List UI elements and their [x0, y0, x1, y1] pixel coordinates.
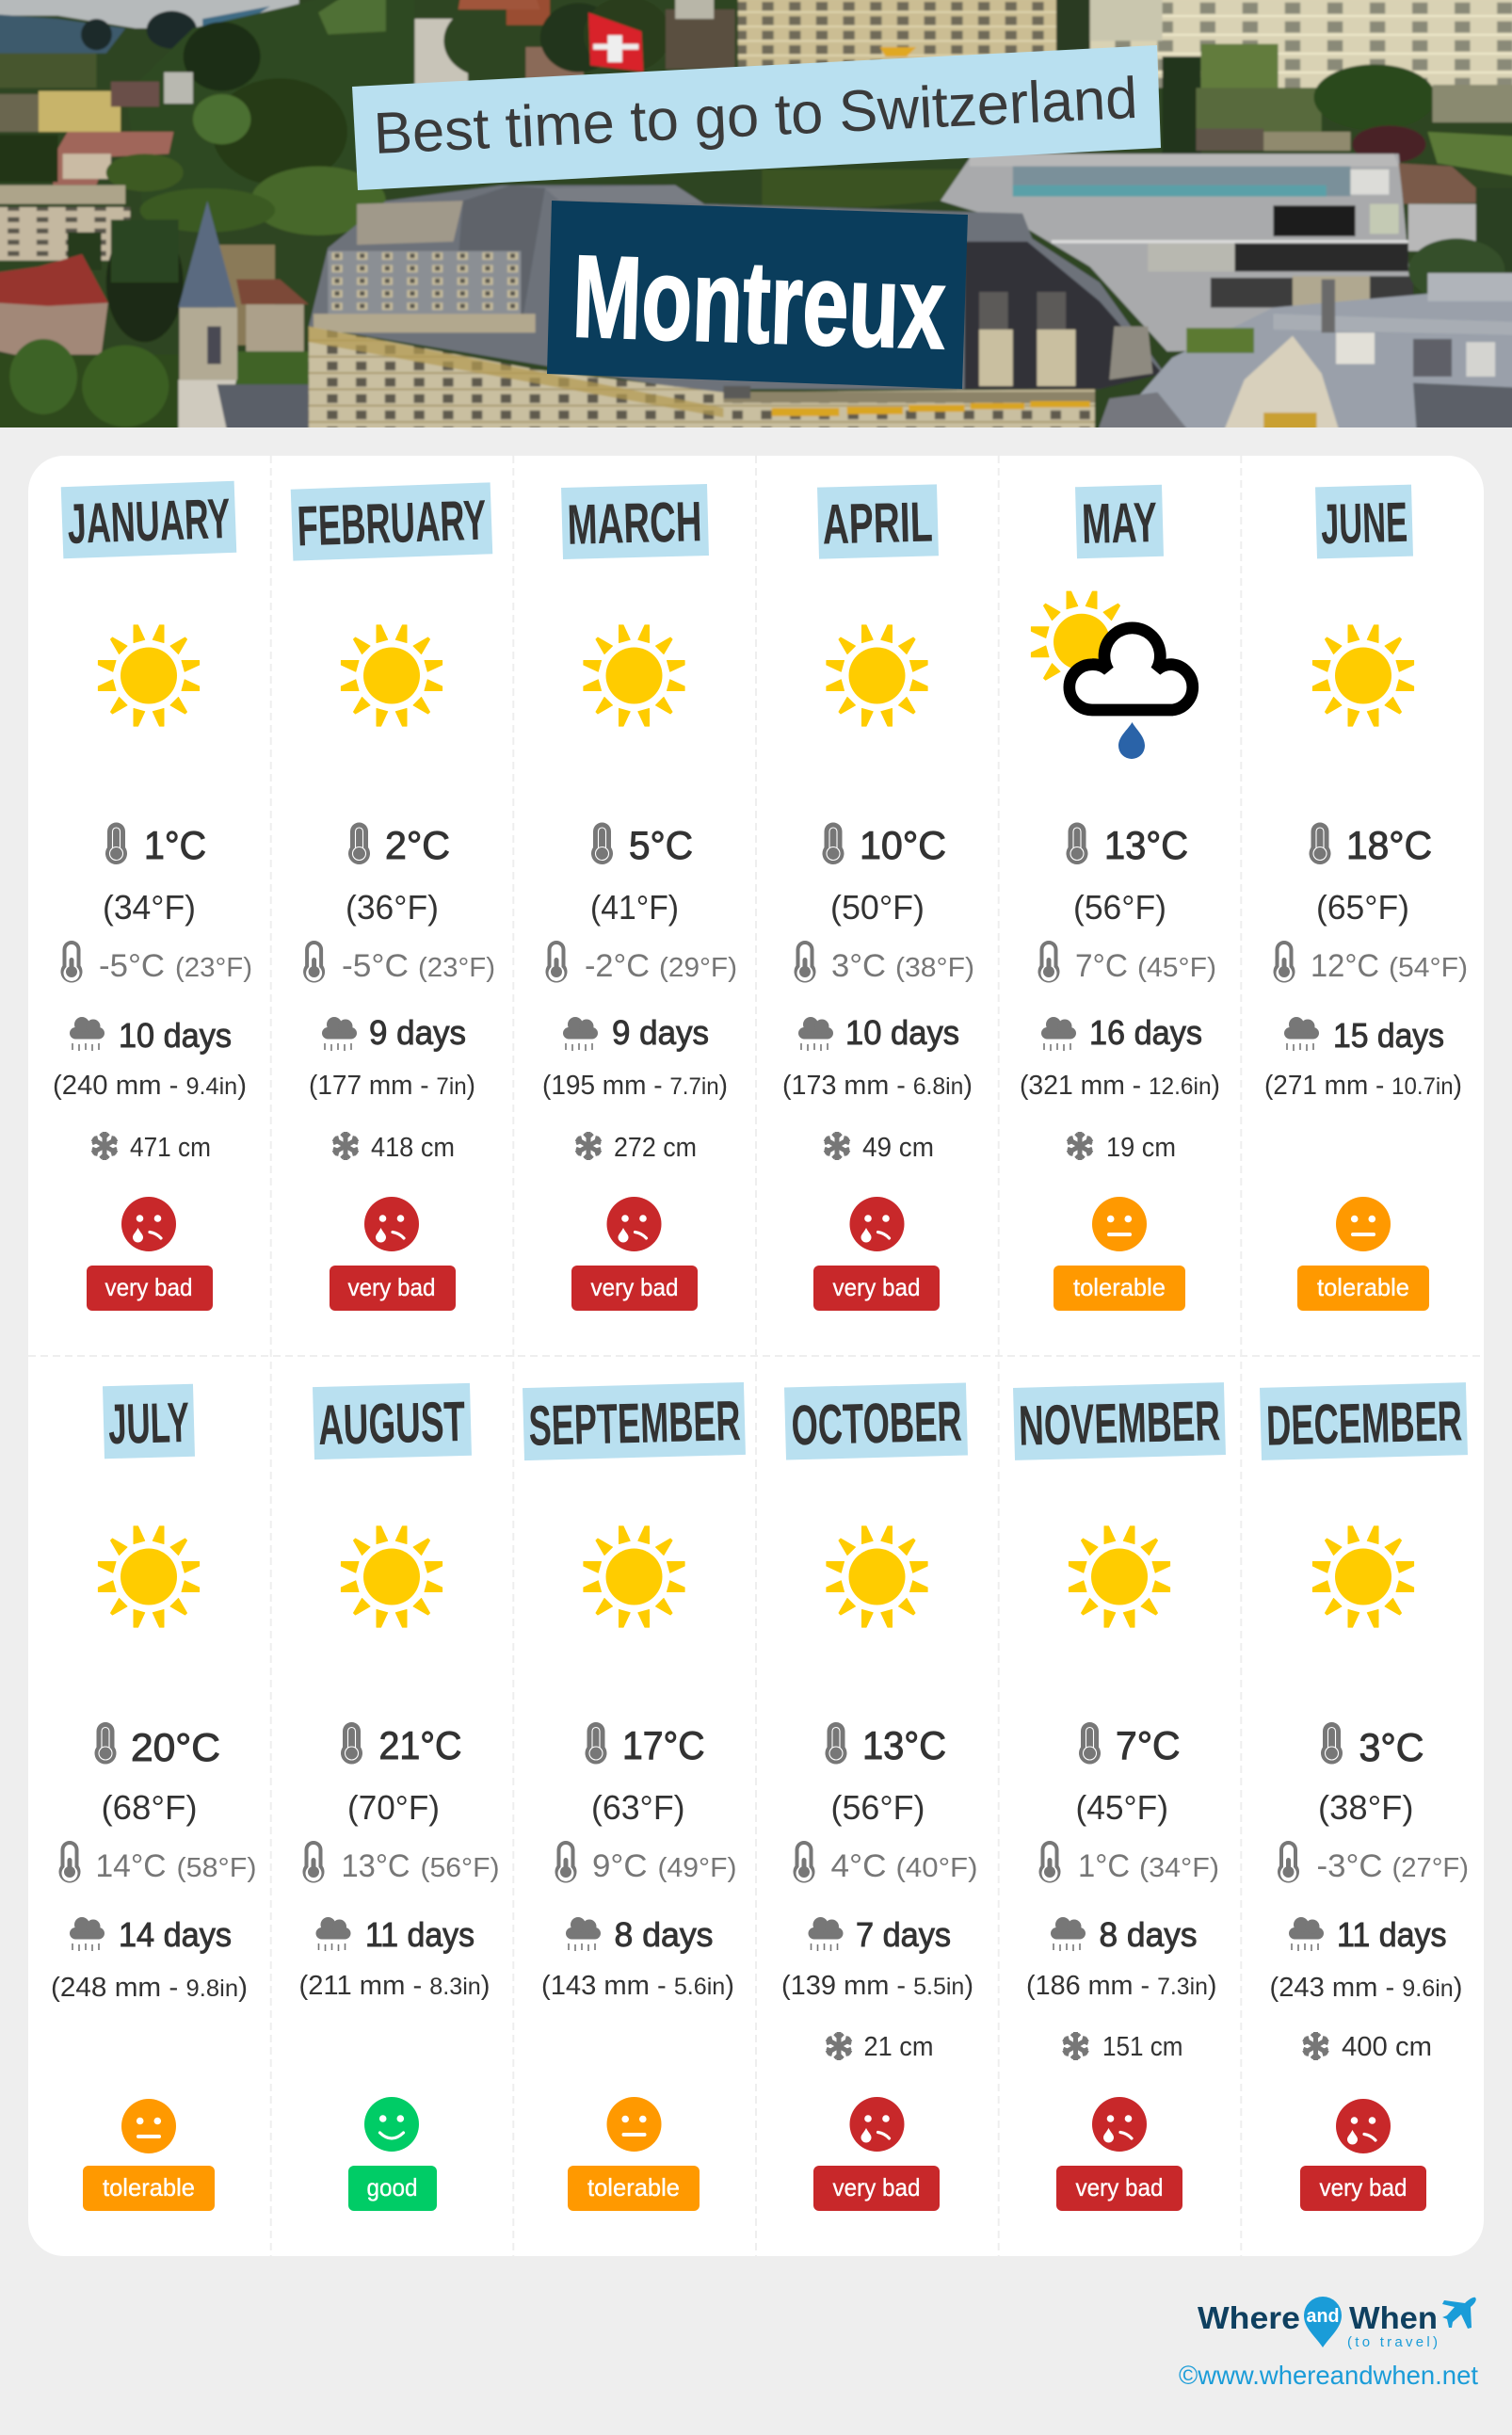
logo: Where and When (to travel): Where — [1198, 2300, 1300, 2335]
rating: very bad — [330, 1197, 456, 1311]
rain days: 8 days — [614, 1915, 714, 1954]
high temperature: (38°F) — [1318, 1788, 1414, 1827]
snowfall: 418 cm — [371, 1133, 455, 1163]
high temperature: 2°C — [385, 823, 450, 867]
snowfall — [827, 2032, 934, 2062]
low temperature: (38°F) — [895, 953, 974, 983]
panel: October — [781, 1383, 977, 2211]
title box: Montreux — [547, 201, 968, 389]
panel: August — [299, 1383, 499, 2211]
low temperature — [1039, 1841, 1219, 1884]
low temperature — [303, 1841, 499, 1884]
low temperature: -3°C — [1316, 1848, 1382, 1884]
month label: March: MARCH — [567, 490, 702, 556]
copyright url: ©www.whereandwhen.net — [1179, 2361, 1478, 2390]
high temperature: 20°C — [131, 1725, 220, 1769]
high temperature: 3°C — [1359, 1725, 1424, 1769]
snowfall: 471 cm — [130, 1133, 211, 1163]
panel: March — [542, 484, 737, 1311]
rating: tolerable — [83, 2099, 215, 2211]
rating: good — [348, 2097, 437, 2211]
panel: June — [1264, 485, 1468, 1311]
high temperature: (36°F) — [346, 888, 439, 927]
low temperature — [58, 1841, 256, 1884]
high temperature — [1075, 1722, 1181, 1827]
high temperature: 17°C — [622, 1723, 704, 1767]
rating: very bad: very bad — [591, 1273, 678, 1301]
snowfall — [1303, 2032, 1432, 2062]
rating: very bad: very bad — [1075, 2173, 1164, 2201]
snowfall — [1068, 1132, 1176, 1163]
icon: sun — [1312, 625, 1414, 726]
low temperature: 7°C — [1075, 948, 1128, 984]
rating: very bad: very bad — [105, 1273, 192, 1301]
high temperature — [341, 1722, 461, 1827]
rain days — [542, 1013, 728, 1101]
snowfall: 49 cm — [862, 1133, 934, 1163]
snowfall: 151 cm — [1102, 2032, 1182, 2062]
rating: very bad: very bad — [348, 1273, 435, 1301]
rating: very bad: very bad — [832, 1273, 921, 1301]
high temperature — [94, 1722, 220, 1827]
low temperature: (23°F) — [175, 953, 252, 983]
snowfall — [1064, 2032, 1182, 2062]
month label: September: SEPTEMBER — [528, 1389, 741, 1458]
rain days: (173 mm - 6.8in) — [782, 1071, 973, 1101]
rain days — [51, 1915, 248, 2003]
low temperature — [555, 1841, 736, 1884]
rating: very bad — [1300, 2099, 1426, 2211]
icon: sun behind rain cloud — [1031, 591, 1193, 759]
low temperature: 3°C — [831, 948, 886, 984]
high temperature: 5°C — [629, 823, 693, 867]
rating: very bad — [813, 2097, 940, 2211]
panel: September — [523, 1382, 746, 2211]
rating: tolerable — [568, 2097, 700, 2211]
low temperature: -5°C — [99, 948, 165, 984]
title box: Montreux: Montreux — [571, 232, 947, 374]
high temperature: (70°F) — [347, 1788, 440, 1827]
month label: April: APRIL — [822, 490, 933, 556]
low temperature: (45°F) — [1137, 953, 1216, 983]
high temperature: (63°F) — [591, 1788, 685, 1827]
low temperature: (49°F) — [657, 1853, 736, 1883]
rain days: 9 days — [612, 1013, 709, 1052]
high temperature: (45°F) — [1075, 1788, 1168, 1827]
rain days: 7 days — [856, 1915, 951, 1954]
rain days — [53, 1016, 247, 1101]
low temperature: (40°F) — [896, 1853, 977, 1883]
snowfall: 272 cm — [614, 1133, 697, 1163]
rain days — [309, 1013, 475, 1101]
logo: Where and When (to travel) — [1198, 2297, 1476, 2350]
icon: sun — [584, 625, 684, 726]
panel: December — [1260, 1382, 1469, 2211]
rating: very bad: very bad — [832, 2173, 921, 2201]
rain days: (143 mm - 5.6in) — [541, 1971, 734, 2001]
month label: June — [1315, 485, 1413, 558]
high temperature: (68°F) — [102, 1788, 198, 1827]
high temperature — [103, 823, 206, 927]
title ribbon: Best time to go to Switzerland: Best time to go to Switzerland — [372, 66, 1139, 167]
rain days: 10 days — [119, 1016, 232, 1055]
low temperature: 1°C — [1078, 1848, 1130, 1884]
snowfall — [92, 1132, 211, 1163]
rating: very bad — [1056, 2097, 1182, 2211]
rain days: (240 mm - 9.4in) — [53, 1071, 247, 1101]
title ribbon: Best time to go to Switzerland — [352, 45, 1161, 190]
icon: sun — [98, 625, 200, 726]
month label: November: NOVEMBER — [1018, 1389, 1221, 1458]
rain days: (195 mm - 7.7in) — [542, 1071, 728, 1101]
high temperature — [823, 823, 946, 927]
high temperature: (34°F) — [103, 888, 196, 927]
month label: May — [1075, 485, 1164, 558]
rain days: 11 days — [365, 1915, 475, 1954]
rating: tolerable — [1297, 1197, 1429, 1311]
rain days: (321 mm - 12.6in) — [1020, 1071, 1220, 1101]
low temperature: -5°C — [342, 948, 409, 984]
icon: sun — [1312, 1526, 1414, 1627]
month label: February — [291, 482, 492, 561]
high temperature: 7°C — [1116, 1723, 1181, 1767]
high temperature: (50°F) — [830, 888, 925, 927]
high temperature: (56°F) — [830, 1788, 925, 1827]
low temperature: (54°F) — [1389, 953, 1468, 983]
month label: May: MAY — [1081, 491, 1158, 556]
month label: October — [784, 1383, 968, 1460]
low temperature: 13°C — [341, 1848, 410, 1884]
icon: sun — [827, 1526, 927, 1627]
month label: July — [103, 1384, 195, 1459]
rating: tolerable: tolerable — [103, 2173, 195, 2201]
icon: sun — [584, 1526, 684, 1627]
high temperature — [825, 1722, 946, 1827]
panel: February — [291, 482, 495, 1311]
header photo: Montreux town view — [0, 0, 1512, 452]
high temperature: 1°C — [144, 823, 206, 867]
low temperature — [1273, 941, 1468, 984]
low temperature — [1037, 941, 1216, 984]
icon: sun — [827, 625, 927, 726]
month label: March — [561, 484, 709, 559]
rain days: 15 days — [1333, 1016, 1444, 1055]
month label: January: JANUARY — [66, 487, 232, 556]
low temperature: 14°C — [96, 1848, 166, 1884]
rating: tolerable: tolerable — [587, 2173, 680, 2201]
high temperature — [590, 823, 693, 927]
rain days: (243 mm - 9.6in) — [1269, 1973, 1463, 2003]
icon: sun — [1069, 1526, 1170, 1627]
rating: very bad — [571, 1197, 698, 1311]
low temperature — [795, 941, 974, 984]
rain days: 9 days — [369, 1013, 466, 1052]
low temperature: (34°F) — [1139, 1853, 1219, 1883]
rain days: (211 mm - 8.3in) — [299, 1971, 490, 2001]
month label: February: FEBRUARY — [296, 489, 488, 557]
rain days: (177 mm - 7in) — [309, 1071, 475, 1101]
icon: sun — [341, 625, 442, 726]
low temperature — [546, 941, 737, 984]
low temperature: (58°F) — [177, 1853, 256, 1883]
panel: May — [1020, 485, 1220, 1311]
logo: Where and When (to travel): When — [1349, 2300, 1438, 2335]
low temperature: (23°F) — [418, 953, 495, 983]
high temperature: (65°F) — [1316, 888, 1409, 927]
rain days: 11 days — [1337, 1915, 1446, 1954]
rain days — [1020, 1013, 1220, 1101]
month label: October: OCTOBER — [791, 1390, 962, 1457]
low temperature: -2°C — [585, 948, 650, 984]
panel: November — [1013, 1382, 1226, 2211]
icon: sun — [341, 1526, 442, 1627]
rain days: 8 days — [1100, 1915, 1198, 1954]
low temperature — [303, 941, 495, 984]
rain days: 14 days — [119, 1915, 232, 1954]
high temperature — [1309, 823, 1432, 927]
high temperature — [1066, 823, 1188, 927]
high temperature: (56°F) — [1073, 888, 1166, 927]
snowfall: 19 cm — [1106, 1133, 1176, 1163]
month label: April — [817, 484, 939, 559]
high temperature: 13°C — [862, 1723, 946, 1767]
month label: August: AUGUST — [317, 1390, 466, 1457]
rain days: (186 mm - 7.3in) — [1026, 1971, 1216, 2001]
high temperature — [346, 823, 450, 927]
snowfall: 400 cm — [1342, 2032, 1432, 2062]
low temperature: (29°F) — [659, 953, 737, 983]
high temperature: 21°C — [378, 1723, 461, 1767]
month label: September — [523, 1382, 746, 1460]
rating: very bad — [813, 1197, 940, 1311]
high temperature: 18°C — [1346, 823, 1432, 867]
low temperature: 12°C — [1311, 948, 1379, 984]
logo: Where and When (to travel): (to travel) — [1347, 2334, 1438, 2350]
panel: January — [53, 481, 252, 1311]
month label: July: JULY — [107, 1391, 190, 1456]
rain days: (139 mm - 5.5in) — [781, 1971, 973, 2001]
icon: sun — [98, 1526, 200, 1627]
rain days — [299, 1915, 490, 2001]
rating: very bad: very bad — [1320, 2173, 1407, 2201]
high temperature — [586, 1722, 704, 1827]
rain days: 16 days — [1089, 1013, 1202, 1052]
rain days — [782, 1013, 973, 1101]
low temperature: 4°C — [830, 1848, 887, 1884]
high temperature: 10°C — [860, 823, 946, 867]
rating: good: good — [367, 2173, 418, 2201]
rating: very bad — [87, 1197, 213, 1311]
rating: tolerable: tolerable — [1317, 1273, 1409, 1301]
rain days — [541, 1915, 734, 2001]
rain days: (271 mm - 10.7in) — [1264, 1071, 1462, 1101]
low temperature — [793, 1841, 977, 1884]
panel: July — [51, 1384, 256, 2211]
low temperature — [1278, 1841, 1469, 1884]
month label: June: JUNE — [1320, 491, 1408, 556]
logo: Where and When (to travel): and — [1307, 2306, 1339, 2327]
snowfall: 21 cm — [864, 2032, 934, 2062]
month label: November — [1013, 1382, 1226, 1460]
low temperature: 9°C — [592, 1848, 648, 1884]
rain days: 10 days — [845, 1013, 959, 1052]
month label: January — [61, 481, 236, 558]
rain days — [781, 1915, 973, 2001]
panel: monthly calendar card — [28, 456, 1484, 2256]
panel: April — [782, 484, 974, 1311]
icon: airplane — [1442, 2298, 1476, 2329]
low temperature: (56°F) — [420, 1853, 499, 1883]
month label: August — [313, 1383, 472, 1459]
snowfall — [825, 1132, 934, 1163]
low temperature: (27°F) — [1391, 1853, 1469, 1883]
rating: tolerable — [1054, 1197, 1185, 1311]
rain days — [1264, 1016, 1462, 1101]
high temperature — [1318, 1722, 1424, 1827]
rain days: (248 mm - 9.8in) — [51, 1973, 248, 2003]
high temperature: 13°C — [1104, 823, 1188, 867]
rain days — [1026, 1915, 1216, 2001]
rating: tolerable: tolerable — [1073, 1273, 1166, 1301]
low temperature — [60, 941, 252, 984]
rain days — [1269, 1915, 1463, 2003]
snowfall — [333, 1132, 455, 1163]
high temperature: (41°F) — [590, 888, 679, 927]
snowfall — [576, 1132, 697, 1163]
